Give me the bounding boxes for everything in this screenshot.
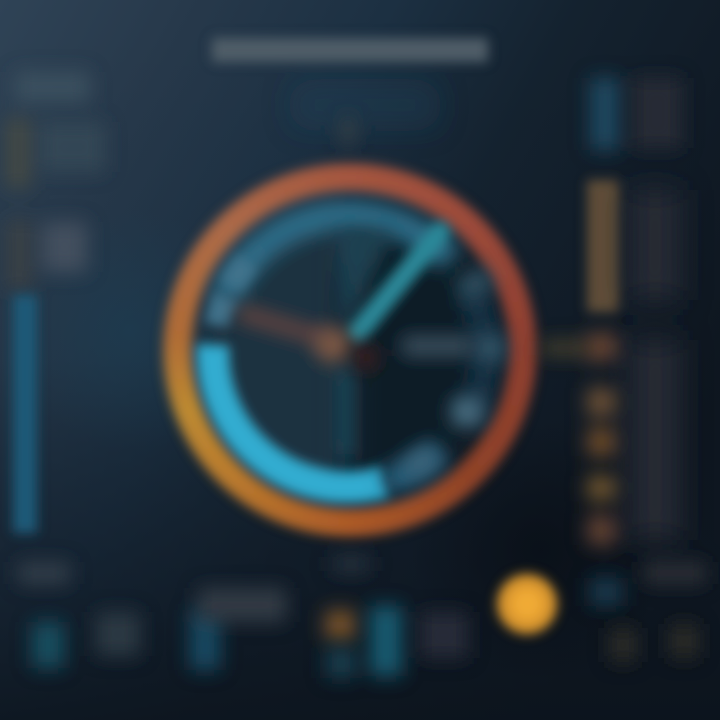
bottom: center label <box>332 556 370 572</box>
gauge: red needle <box>238 312 330 340</box>
gauge: hub <box>315 327 351 363</box>
left panel: vertical bar <box>13 295 37 533</box>
left panel: labels <box>6 72 105 290</box>
gauge: inner ring bright arc <box>213 345 385 487</box>
gauge: right tick lower <box>452 398 482 426</box>
bottom: gray block <box>198 588 286 622</box>
bottom: orange icon <box>325 610 355 640</box>
gauge: inner ring top dim <box>224 215 450 300</box>
right panel: orange column <box>587 180 619 312</box>
gauge: outer ring <box>150 150 550 550</box>
bottom: gray block 2 <box>420 612 468 658</box>
gauge: inner ring bottom right fade <box>385 450 440 482</box>
gauge: right tick upper <box>454 265 496 303</box>
right panel: orange segments <box>586 333 618 545</box>
gauge: right connector <box>542 340 588 356</box>
right panel: top labels <box>632 78 682 148</box>
bottom: teal icon <box>32 622 64 668</box>
gauge: right tick middle <box>478 335 504 361</box>
bottom: left label <box>18 562 70 584</box>
right panel: bottom marker <box>590 578 622 606</box>
gauge: inner ring left lighter patches <box>216 252 258 325</box>
gauge: bottom right tick <box>402 445 440 480</box>
title <box>212 38 488 130</box>
gauge: teal wedge <box>335 230 395 330</box>
gauge: lower vertical band <box>336 365 354 460</box>
right panel: labels <box>630 190 680 540</box>
right panel <box>586 78 706 606</box>
icon: sun circle <box>497 574 557 634</box>
gauge <box>150 118 588 550</box>
gauge: right ring dark <box>470 290 485 415</box>
gauge: dial face left <box>200 205 345 495</box>
bottom: blue column 2 <box>370 606 402 676</box>
bottom: gray icon <box>96 612 140 656</box>
gauge: hub dark centre <box>353 345 379 371</box>
bottom: blue column <box>190 610 220 670</box>
gauge: readout <box>402 336 472 356</box>
gauge: cyan needle <box>358 232 440 332</box>
bottom row <box>18 556 698 678</box>
gauge: dial face right <box>355 205 500 495</box>
gauge: top marker <box>340 118 356 144</box>
bottom: right icons <box>610 624 698 662</box>
right panel: bottom label <box>644 562 706 584</box>
right panel: top blue marker <box>590 78 620 150</box>
bottom: small teal icon <box>326 648 356 678</box>
